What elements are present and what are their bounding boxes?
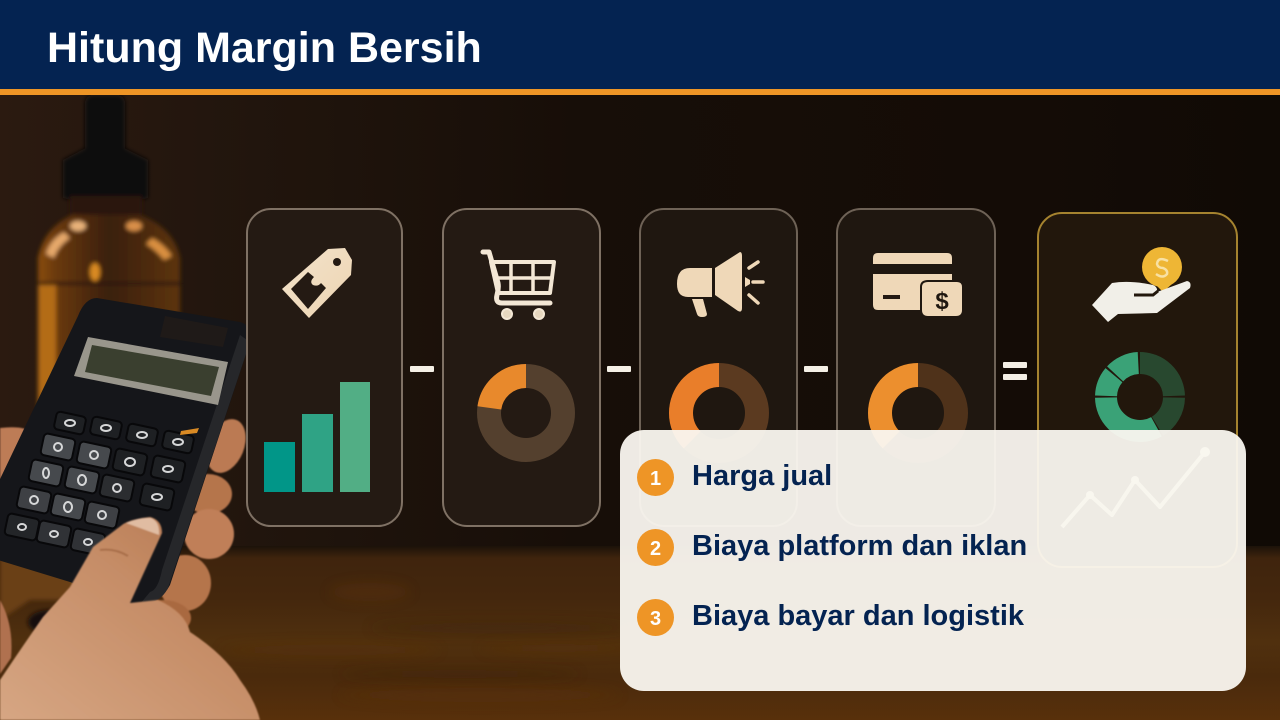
amber dropper bottle — [38, 95, 180, 435]
chart: rising bars — [264, 382, 370, 492]
icon: shopping cart — [483, 252, 554, 319]
header bar — [0, 0, 1280, 89]
orange header rule — [0, 89, 1280, 95]
icon: credit card with dollar badge: $ — [935, 288, 949, 315]
icon: price tag — [282, 248, 352, 318]
solar strip — [160, 316, 228, 347]
key glyphs — [18, 420, 183, 545]
list item 3: 3 — [650, 608, 661, 630]
list item 2: Biaya platform dan iklan — [692, 530, 1027, 562]
fingers behind calculator — [0, 413, 253, 674]
chart: donut payment share — [880, 375, 956, 451]
chart: donut net margin — [1106, 363, 1174, 431]
card 2: platform cost — [443, 209, 600, 526]
minus operator — [410, 366, 434, 372]
list item 1: Harga jual — [692, 460, 832, 492]
icon: credit card with dollar badge — [873, 253, 963, 317]
blurred reflection under calculator — [0, 540, 100, 634]
card 3: advertising cost — [640, 209, 797, 526]
calculator display — [74, 337, 228, 405]
equals operator — [1003, 362, 1027, 380]
card 4: payment and logistics cost — [837, 209, 995, 526]
minus operator — [804, 366, 828, 372]
chart: rising margin line — [1062, 447, 1210, 527]
orange key accent — [180, 428, 199, 435]
calculator — [0, 298, 251, 604]
chart: donut platform share — [489, 376, 563, 450]
list item 1 — [637, 459, 832, 496]
panel: margin components list — [620, 430, 1246, 691]
wooden table — [0, 546, 1280, 720]
icon: megaphone — [677, 252, 763, 317]
list item 3: Biaya bayar dan logistik — [692, 600, 1024, 632]
list item 2: 2 — [650, 538, 661, 560]
dark wall — [0, 95, 1280, 550]
calculator keys — [4, 411, 195, 556]
chart: donut advertising share — [681, 375, 757, 451]
hand and thumb — [0, 517, 260, 720]
list item 1: 1 — [650, 468, 661, 490]
title: Hitung Margin Bersih — [47, 24, 482, 72]
minus operator — [607, 366, 631, 372]
card 5: net margin result — [1038, 213, 1237, 567]
card 1: selling price — [247, 209, 402, 526]
icon: hand holding coin — [1092, 247, 1191, 322]
